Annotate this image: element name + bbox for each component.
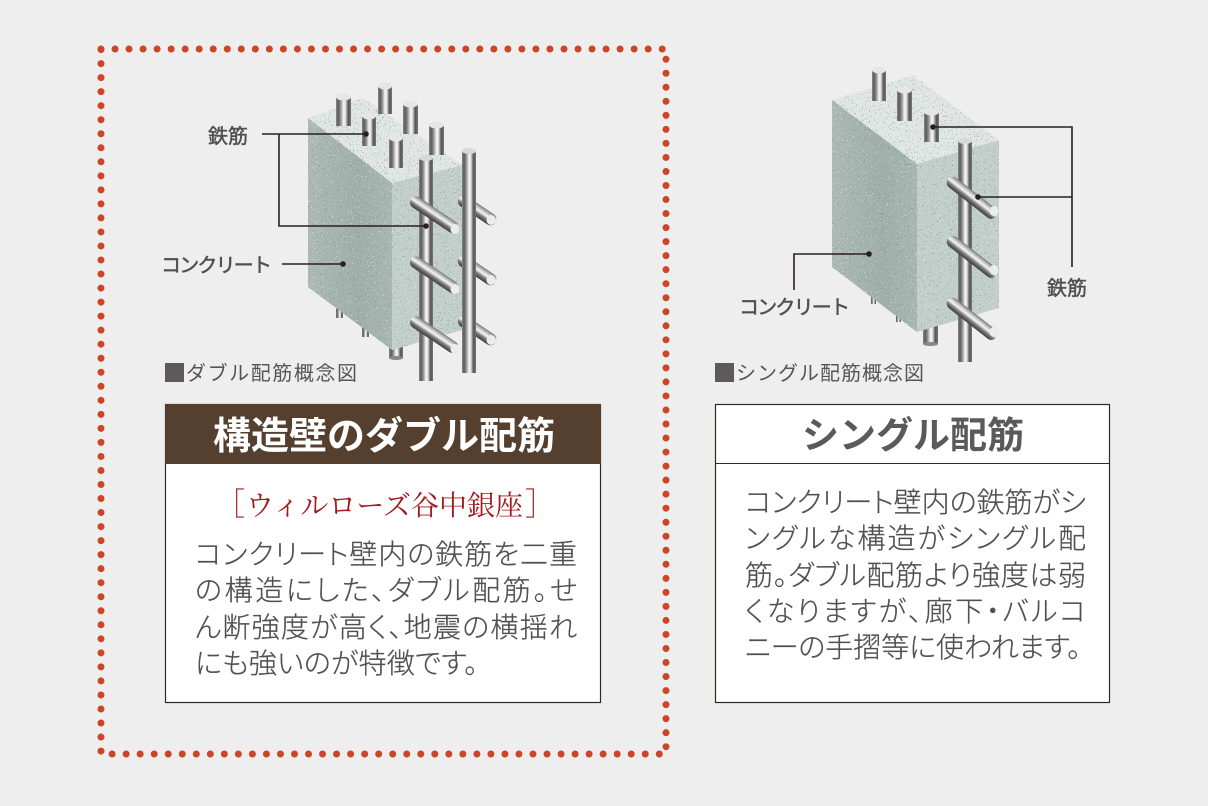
heading: 構造壁のダブル配筋 bbox=[213, 415, 555, 458]
front rebar grid bbox=[408, 155, 461, 381]
lower rod stubs bbox=[336, 306, 403, 360]
concrete block bbox=[832, 75, 999, 332]
panel: double reinforcement bbox=[165, 404, 601, 702]
description text: ニーの手摺等に使われます。 bbox=[745, 632, 1081, 663]
top rods bbox=[872, 66, 939, 142]
diagram: single reinforcement bbox=[739, 66, 1087, 362]
leader lines: rebar bbox=[262, 131, 429, 229]
description text: コンクリート壁内の鉄筋を二重 bbox=[195, 539, 577, 570]
label: rebar: 鉄筋 bbox=[208, 125, 248, 148]
leader line: concrete bbox=[794, 251, 872, 290]
caption: single diagram: シングル配筋概念図 bbox=[736, 362, 924, 385]
subheading: ［ bbox=[214, 487, 245, 522]
label: concrete: コンクリート bbox=[161, 254, 272, 277]
description text: くなりますが、廊下・バルコ bbox=[745, 596, 1086, 627]
rear rebar grid bbox=[456, 148, 499, 373]
subheading: ］ bbox=[525, 487, 556, 522]
description text bbox=[195, 539, 577, 679]
heading: シングル配筋 bbox=[802, 415, 1024, 456]
description text: コンクリート壁内の鉄筋がシ bbox=[745, 487, 1086, 518]
label: rebar: 鉄筋 bbox=[1047, 277, 1087, 300]
description text: ングルな構造がシングル配 bbox=[745, 523, 1086, 554]
lower rod stubs bbox=[871, 296, 938, 346]
panel: single reinforcement bbox=[716, 404, 1110, 702]
diagram: double reinforcement bbox=[161, 82, 499, 381]
description text: ん断強度が高く、地震の横揺れ bbox=[195, 612, 577, 643]
subheading: ウィルローズ谷中銀座 bbox=[246, 490, 523, 522]
panel header divider bbox=[716, 462, 1110, 464]
leader line: concrete bbox=[282, 261, 346, 267]
leader lines: rebar bbox=[930, 124, 1072, 267]
dotted highlight frame bbox=[101, 49, 666, 754]
panel header bar bbox=[165, 404, 601, 464]
description text bbox=[745, 487, 1086, 663]
concrete block bbox=[308, 98, 462, 350]
caption: double diagram: ダブル配筋概念図 bbox=[186, 361, 357, 385]
top rods bbox=[336, 82, 444, 168]
rebar grid bbox=[944, 138, 1000, 362]
description text: 筋。ダブル配筋より強度は弱 bbox=[745, 560, 1086, 591]
description text: の構造にした、ダブル配筋。せ bbox=[195, 575, 577, 606]
description text: にも強いのが特徴です。 bbox=[195, 648, 478, 679]
label: concrete: コンクリート bbox=[739, 296, 850, 319]
